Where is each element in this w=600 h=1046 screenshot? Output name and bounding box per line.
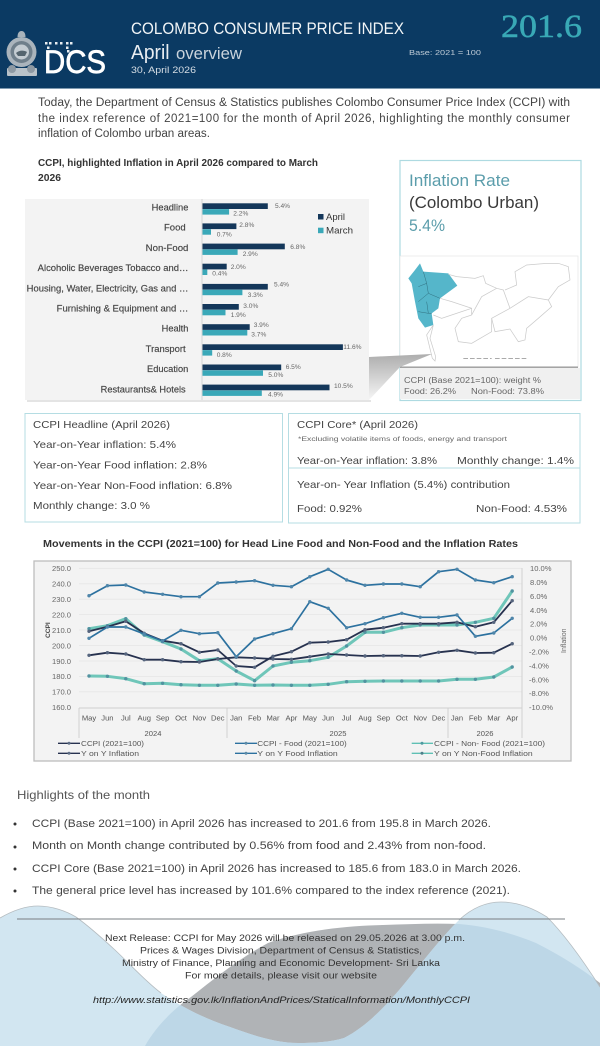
highlights list: CCPI (Base 2021=100) in April 2026 has increased to 201.6 from 195.8 in March 2026. — [32, 818, 491, 830]
panel: CCPI headline: Monthly change: 3.0 % — [33, 500, 150, 512]
line chart: CCPI and inflation — [34, 561, 571, 761]
highlights list: The general price level has increased by 101.6% compared to the index reference (2021). — [32, 885, 510, 897]
month labels: May — [303, 714, 317, 723]
month labels: Dec — [211, 714, 225, 723]
panel: CCPI core: Monthly change: 1.4% — [457, 455, 574, 467]
icon: national emblem — [6, 31, 37, 76]
month labels: Oct — [175, 714, 188, 723]
month labels: Apr — [506, 714, 519, 723]
month labels: Aug — [358, 714, 372, 723]
category labels: Transport — [146, 344, 186, 354]
line chart legend: Y on Y Food Inflation — [257, 749, 338, 758]
right axis labels: 0.0% — [530, 634, 548, 643]
inflation rate label: Inflation Rate — [409, 171, 510, 190]
month labels: Nov — [413, 714, 427, 723]
bar chart heading: 2026 — [38, 173, 61, 184]
value labels: 2.9% — [243, 251, 258, 258]
month labels: Feb — [248, 714, 261, 723]
left axis labels: 170.0 — [52, 688, 71, 697]
value labels: 5.0% — [268, 372, 283, 379]
value labels: 3.9% — [254, 322, 269, 329]
right axis labels — [529, 564, 553, 712]
left axis labels: 250.0 — [52, 564, 71, 573]
weight note: Non-Food: 73.8% — [471, 386, 544, 396]
month labels: May — [82, 714, 96, 723]
bar chart legend: April — [326, 212, 345, 223]
left axis labels: 160.0 — [52, 703, 71, 712]
month labels: Feb — [469, 714, 482, 723]
weight note: CCPI (Base 2021=100): weight % — [404, 375, 541, 385]
line chart legend: CCPI - Non- Food (2021=100) — [434, 739, 545, 748]
month labels: Jul — [121, 714, 131, 723]
value labels: 4.9% — [268, 392, 283, 398]
line chart heading: Movements in the CCPI (2021=100) for Head Line Food and Non-Food and the Inflation Rates — [43, 538, 518, 550]
right axis labels: 10.0% — [530, 564, 552, 573]
bar chart legend — [318, 212, 353, 237]
category labels: Housing, Water, Electricity, Gas and … — [27, 283, 188, 293]
left axis labels: 190.0 — [52, 657, 71, 666]
panel: CCPI core: Non-Food: 4.53% — [476, 503, 567, 515]
background waves — [0, 902, 600, 1046]
region label: (Colombo Urban) — [409, 193, 539, 212]
footer text: For more details, please visit our website — [185, 970, 377, 982]
left axis labels — [52, 564, 71, 712]
value labels: 6.8% — [290, 244, 305, 251]
highlights list: Month on Month change contributed by 0.56% from food and 2.43% from non-food. — [32, 840, 486, 852]
footer text — [93, 933, 470, 1006]
right axis labels: 4.0% — [530, 606, 548, 615]
highlights list — [14, 818, 521, 897]
left axis labels: 240.0 — [52, 580, 71, 588]
right axis labels: -4.0% — [529, 661, 549, 670]
month labels: Apr — [285, 714, 298, 723]
bar chart: inflation by category — [25, 199, 371, 402]
left axis labels: 230.0 — [52, 595, 71, 604]
headline index value: 201.6 — [501, 9, 582, 45]
value labels — [212, 203, 362, 398]
month labels: Jun — [101, 714, 114, 723]
weight note — [400, 368, 580, 399]
category labels: Restaurants& Hotels — [101, 384, 186, 394]
footer text: Next Release: CCPI for May 2026 will be released on 29.05.2026 at 3.00 p.m. — [105, 933, 465, 944]
year labels — [145, 729, 493, 738]
series: headline index and inflation — [89, 601, 512, 667]
month labels: Oct — [396, 714, 409, 723]
inflation rate value: 5.4% — [409, 216, 445, 235]
line chart legend: CCPI (2021=100) — [81, 739, 144, 748]
month labels: Mar — [266, 714, 280, 723]
panel: CCPI core: *Excluding volatile items of foods, energy and transport — [298, 436, 507, 443]
panel: CCPI headline: CCPI Headline (April 2026) — [33, 419, 170, 431]
footer text: Prices & Wages Division, Department of Census & Statistics, — [140, 946, 422, 956]
logo: DCS: DCS — [44, 44, 106, 80]
value labels: 3.3% — [248, 292, 263, 299]
title: COLOMBO CONSUMER PRICE INDEX — [131, 19, 404, 38]
panel: CCPI core: Food: 0.92% — [297, 503, 362, 515]
subtitle: April overview — [131, 42, 242, 64]
highlights heading: Highlights of the month — [17, 788, 150, 802]
intro paragraph — [38, 97, 570, 140]
month labels: Nov — [193, 714, 206, 723]
value labels: 6.5% — [286, 364, 301, 371]
category labels: Food — [164, 223, 186, 233]
month labels: Aug — [137, 714, 151, 723]
category labels: Health — [162, 324, 189, 334]
line chart legend — [58, 739, 545, 758]
date: 30, April 2026 — [131, 65, 196, 76]
month labels: Jul — [342, 714, 352, 723]
series: food index and food inflation — [89, 569, 512, 657]
month labels: Jun — [322, 714, 334, 723]
month labels: Jan — [451, 714, 463, 723]
intro paragraph: inflation of Colombo urban areas. — [38, 128, 210, 140]
value labels: 5.4% — [274, 282, 289, 288]
left axis labels: 210.0 — [52, 626, 71, 635]
panel: CCPI core: CCPI Core* (April 2026) — [297, 419, 418, 431]
value labels: 2.8% — [239, 222, 254, 229]
subtitle: April overview: overview — [176, 45, 242, 63]
value labels: 0.4% — [212, 270, 227, 278]
value labels: 10.5% — [334, 383, 353, 390]
intro paragraph: Today, the Department of Census & Statistics publishes Colombo Consumer Price Index (CCPI) with — [38, 97, 570, 109]
month labels: Jan — [230, 714, 242, 723]
value labels: 11.6% — [343, 344, 362, 351]
category labels: Furnishing & Equipment and … — [57, 304, 188, 314]
panel: CCPI core — [288, 414, 580, 523]
category labels: Headline — [152, 202, 189, 212]
value labels: 0.8% — [217, 352, 232, 359]
category labels: Non-Food — [146, 243, 189, 253]
footer text: Ministry of Finance, Planning and Economic Development- Sri Lanka — [122, 958, 441, 969]
value labels: 2.0% — [231, 264, 246, 271]
right axis labels: 8.0% — [530, 578, 548, 587]
highlights list: CCPI Core (Base 2021=100) in April 2026 has increased to 185.6 from 183.0 in March 2026. — [32, 863, 521, 875]
value labels: 1.9% — [231, 312, 246, 319]
left axis labels: 180.0 — [52, 672, 71, 681]
category labels: Education — [147, 364, 188, 374]
April bars — [202, 203, 343, 390]
right axis labels: -2.0% — [529, 648, 549, 656]
right axis labels: -8.0% — [529, 689, 549, 698]
year labels: 2026 — [477, 729, 493, 738]
header banner — [0, 0, 600, 89]
panel: inflation rate — [400, 160, 581, 400]
March bars — [202, 209, 263, 396]
month labels: Mar — [487, 714, 501, 723]
right axis labels: 6.0% — [530, 592, 548, 601]
footer text: http://www.statistics.gov.lk/InflationAndPrices/StaticalInformation/MonthlyCCPI — [93, 995, 470, 1006]
right axis title: Inflation — [561, 628, 568, 653]
panel: CCPI headline: Year-on-Year inflation: 5.4% — [33, 439, 176, 451]
right axis labels: -10.0% — [529, 703, 553, 712]
value labels: 5.4% — [275, 203, 290, 210]
panel: CCPI headline: Year-on-Year Non-Food inflation: 6.8% — [33, 480, 232, 492]
panel: CCPI headline: Year-on-Year Food inflation: 2.8% — [33, 460, 207, 472]
value labels: 3.7% — [251, 332, 266, 338]
line chart legend: Y on Y Inflation — [81, 749, 139, 758]
category labels — [27, 202, 189, 394]
panel: CCPI core: Year-on- Year Inflation (5.4%) contribution — [297, 479, 510, 491]
bar chart legend: March — [326, 226, 353, 237]
weight note: Food: 26.2% — [404, 386, 456, 396]
right axis labels: 2.0% — [530, 620, 548, 629]
value labels: 0.7% — [217, 232, 232, 238]
left axis labels: 200.0 — [52, 641, 71, 650]
value labels: 2.2% — [233, 210, 248, 218]
value labels: 3.0% — [243, 303, 258, 310]
panel: CCPI headline — [25, 414, 282, 522]
intro paragraph: the index reference of 2021=100 for the month of April 2026, highlighting the monthly consumer — [38, 113, 570, 125]
map: Colombo urban area — [400, 256, 578, 368]
subtitle: April overview: April — [131, 42, 170, 64]
series: non-food index and non-food inflation — [89, 591, 512, 685]
month labels: Sep — [377, 714, 390, 723]
left axis labels: 220.0 — [52, 610, 71, 619]
line chart legend: CCPI - Food (2021=100) — [257, 739, 347, 748]
decorative shadow wedge — [369, 354, 432, 400]
year labels: 2025 — [330, 729, 346, 738]
month labels: Sep — [156, 714, 169, 723]
right axis labels: -6.0% — [529, 675, 549, 684]
left axis title: CCPI — [45, 622, 52, 638]
month labels: Dec — [432, 714, 446, 723]
year labels: 2024 — [145, 729, 161, 738]
category labels: Alcoholic Beverages Tobacco and… — [38, 263, 188, 273]
month labels — [82, 714, 519, 723]
bar chart heading — [38, 158, 318, 184]
line chart legend: Y on Y Non-Food Inflation — [434, 749, 533, 758]
panel: CCPI core: Year-on-Year inflation: 3.8% — [297, 455, 437, 467]
bar chart heading: CCPI, highlighted Inflation in April 2026 compared to March — [38, 158, 318, 169]
base note: Base: 2021 = 100 — [409, 48, 481, 57]
